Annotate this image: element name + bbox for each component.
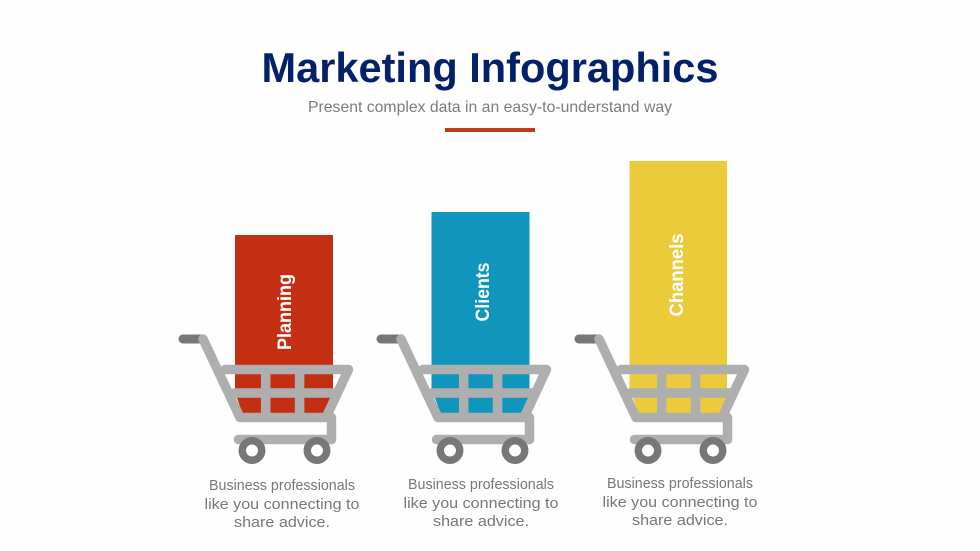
column: Planning: [183, 235, 360, 531]
description: share advice.: [632, 512, 728, 529]
bar label: Channels: Channels: [667, 234, 688, 316]
bar: Clients: [432, 212, 530, 415]
title: Marketing Infographics: [262, 44, 718, 91]
icon: shopping cart: [381, 339, 546, 460]
subtitle: Present complex data in an easy-to-understand way: [308, 99, 672, 116]
description: share advice.: [234, 514, 330, 531]
description: Business professionals: [209, 477, 355, 494]
bar: Channels: [630, 161, 727, 415]
column: Clients: [381, 212, 558, 530]
description: share advice.: [433, 513, 529, 530]
description: like you connecting to: [602, 494, 758, 511]
description: like you connecting to: [404, 495, 558, 512]
description: like you connecting to: [204, 496, 360, 513]
icon: shopping cart: [579, 339, 744, 460]
bar label: Planning: Planning: [275, 274, 296, 350]
bar: Planning: [235, 235, 333, 415]
icon: shopping cart: [183, 339, 348, 460]
accent line: [445, 128, 535, 132]
description: Business professionals: [408, 476, 554, 493]
column: Channels: [579, 161, 758, 529]
bar label: Clients: Clients: [473, 262, 494, 322]
description: Business professionals: [607, 475, 753, 492]
